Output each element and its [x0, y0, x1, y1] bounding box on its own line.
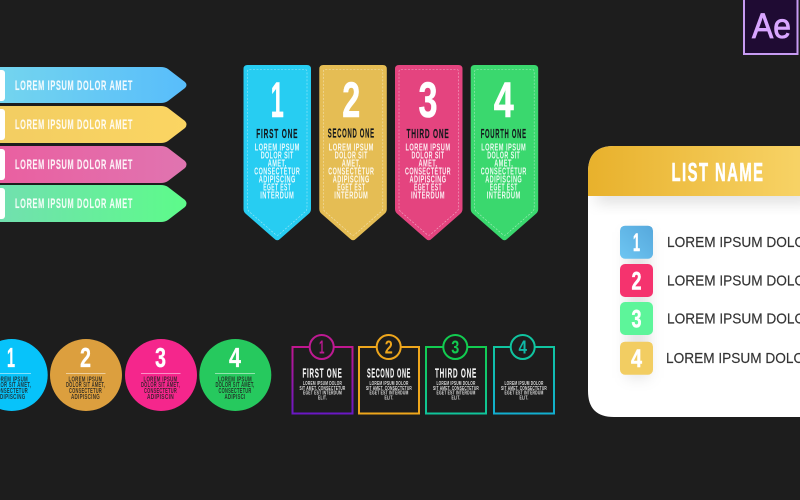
outlined box 2: SECOND ONE — [367, 366, 411, 380]
list row 2: 2 — [632, 268, 642, 296]
circle badge 2 — [50, 339, 122, 411]
ribbon card 4: 4 — [494, 72, 514, 128]
circle badge 2: CONSECTETUR — [69, 388, 102, 395]
outlined box 3: THIRD ONE — [435, 366, 477, 380]
icon: After Effects logo: Ae — [752, 7, 791, 46]
ribbon card 4 — [471, 65, 538, 240]
ribbon card 3: ADIPISCING — [410, 175, 446, 186]
outlined box 2 — [359, 335, 419, 414]
outlined box 4 — [494, 335, 554, 414]
ribbon card 1: INTERDUM — [260, 191, 294, 202]
ribbon card 4: DOLOR SIT — [487, 150, 520, 162]
outlined box 4: EGET EST INTERDUM — [504, 390, 544, 396]
ribbon card 1: FIRST ONE — [256, 127, 298, 141]
ribbon card 3: CONSECTETUR — [405, 167, 451, 178]
ribbon card 4: ADIPISCING — [485, 175, 522, 186]
circle badge 4 — [199, 339, 271, 411]
ribbon card 4: EGET EST — [490, 183, 518, 194]
outlined box 4: ELIT. — [520, 396, 529, 402]
circle badge 4: LOREM IPSUM — [218, 376, 252, 384]
ribbon card 2: 2 — [342, 72, 360, 128]
arrow label 2 — [0, 106, 186, 143]
outlined box 1: ELIT. — [318, 396, 327, 402]
outlined box 2: LOREM IPSUM DOLOR — [370, 381, 409, 387]
ribbon card 4: CONSECTETUR — [481, 167, 527, 178]
list header — [588, 146, 800, 196]
circle badge 2: LOREM IPSUM — [68, 376, 102, 384]
ribbon card 4: INTERDUM — [487, 191, 521, 202]
outlined box 1: FIRST ONE — [302, 366, 342, 380]
outlined box 4: LOREM IPSUM DOLOR — [504, 381, 544, 387]
circle badge 3: DOLOR SIT AMET, — [141, 382, 180, 389]
arrow label 4 — [0, 185, 186, 222]
arrow label 1: LOREM IPSUM DOLOR AMET — [15, 77, 133, 93]
ribbon card 4: LOREM IPSUM — [481, 142, 526, 154]
ribbon card 1: DOLOR SIT — [261, 150, 294, 162]
outlined box 2: SIT AMET, CONSECTETUR — [366, 386, 412, 392]
list row 3: 3 — [632, 306, 642, 334]
ribbon card 1: AMET, — [268, 158, 287, 170]
ribbon card 3: THIRD ONE — [406, 127, 450, 141]
ribbon card 3: LOREM IPSUM — [406, 142, 450, 154]
outlined box 2: ELIT. — [384, 396, 394, 402]
outlined box 3: 3 — [451, 338, 459, 358]
circle badge 4: CONSECTETUR — [218, 388, 252, 395]
ribbon card 2: AMET, — [342, 158, 361, 170]
list row 1 — [620, 226, 800, 259]
circle badge 2: 2 — [80, 342, 91, 373]
circle badge 2: ADIPISCING — [71, 394, 100, 401]
outlined box 2: 2 — [385, 338, 393, 358]
circle badge 1: 1 — [7, 342, 15, 373]
outlined box 2: EGET EST INTERDUM — [370, 390, 408, 396]
circle badge 3: CONSECTETUR — [144, 388, 177, 395]
ribbon card 2 — [319, 65, 387, 240]
list row 4: 4 — [631, 345, 642, 373]
outlined box 4: 4 — [518, 338, 527, 358]
outlined box 3: SIT AMET, CONSECTETUR — [433, 386, 479, 392]
outlined box 1: LOREM IPSUM DOLOR — [303, 381, 342, 387]
arrow label 2: LOREM IPSUM DOLOR AMET — [15, 116, 133, 132]
ribbon card 4: AMET, — [494, 158, 513, 170]
outlined box 3: EGET EST INTERDUM — [436, 390, 476, 396]
ribbon card 3: AMET, — [418, 158, 438, 170]
ribbon card 1: ADIPISCING — [259, 175, 296, 186]
arrow label 3 — [0, 146, 186, 183]
circle badge 4: ADIPISCI — [224, 394, 246, 401]
outlined box 4: SIT AMET, CONSECTETUR — [501, 386, 547, 392]
panel: arrow labels — [0, 67, 186, 222]
ribbon card 1: LOREM IPSUM — [255, 142, 300, 154]
circle badge 3: 3 — [155, 342, 166, 373]
circle badge 1 — [0, 339, 48, 411]
list row 4 — [620, 342, 800, 375]
panel: outlined boxes — [292, 335, 554, 414]
panel: ribbon cards — [244, 65, 538, 240]
ribbon card 3: EGET EST — [414, 183, 442, 194]
circle badge 4: 4 — [229, 342, 241, 373]
ribbon card 2: LOREM IPSUM — [329, 142, 374, 154]
list row 2 — [620, 264, 800, 297]
panel: list card — [588, 146, 800, 417]
ribbon card 2: SECOND ONE — [328, 126, 375, 140]
arrow label 1 — [0, 67, 186, 103]
outlined box 3: LOREM IPSUM DOLOR — [436, 381, 476, 387]
ribbon card 2: DOLOR SIT — [335, 150, 368, 162]
ribbon card 4: FOURTH ONE — [481, 127, 527, 141]
outlined box 3: ELIT. — [452, 396, 461, 402]
circle badge 4: DOLOR SIT AMET, — [216, 382, 254, 389]
ribbon card 3: INTERDUM — [411, 191, 445, 202]
panel: circle badges — [0, 339, 271, 411]
arrow label 4: LOREM IPSUM DOLOR AMET — [15, 195, 133, 211]
arrow label 3: LOREM IPSUM DOLOR AMET — [15, 156, 133, 172]
ribbon card 2: ADIPISCING — [333, 175, 370, 186]
ribbon card 1: CONSECTETUR — [254, 167, 300, 178]
outlined box 1: 1 — [319, 338, 324, 358]
ribbon card 2: CONSECTETUR — [328, 167, 374, 178]
ribbon card 3 — [395, 65, 462, 240]
outlined box 3 — [426, 335, 486, 414]
circle badge 3 — [125, 339, 197, 411]
ribbon card 1: EGET EST — [263, 183, 291, 194]
ribbon card 3: DOLOR SIT — [412, 150, 444, 162]
list row 3 — [620, 302, 800, 335]
circle badge 3: ADIPISCIN — [147, 394, 174, 401]
ribbon card 2: INTERDUM — [334, 191, 368, 202]
outlined box 1 — [292, 335, 352, 414]
ribbon card 3: 3 — [418, 72, 438, 128]
ribbon card 1 — [244, 65, 311, 240]
circle badge 3: LOREM IPSUM — [144, 376, 178, 384]
list row 1: 1 — [633, 229, 640, 257]
circle badge 2: DOLOR SIT AMET, — [66, 382, 105, 389]
ribbon card 2: EGET EST — [337, 183, 365, 194]
outlined box 1: EGET EST INTERDUM — [303, 390, 342, 396]
outlined box 1: SIT AMET, CONSECTETUR — [300, 386, 346, 392]
icon: After Effects logo — [744, 0, 798, 54]
ribbon card 1: 1 — [271, 72, 284, 128]
